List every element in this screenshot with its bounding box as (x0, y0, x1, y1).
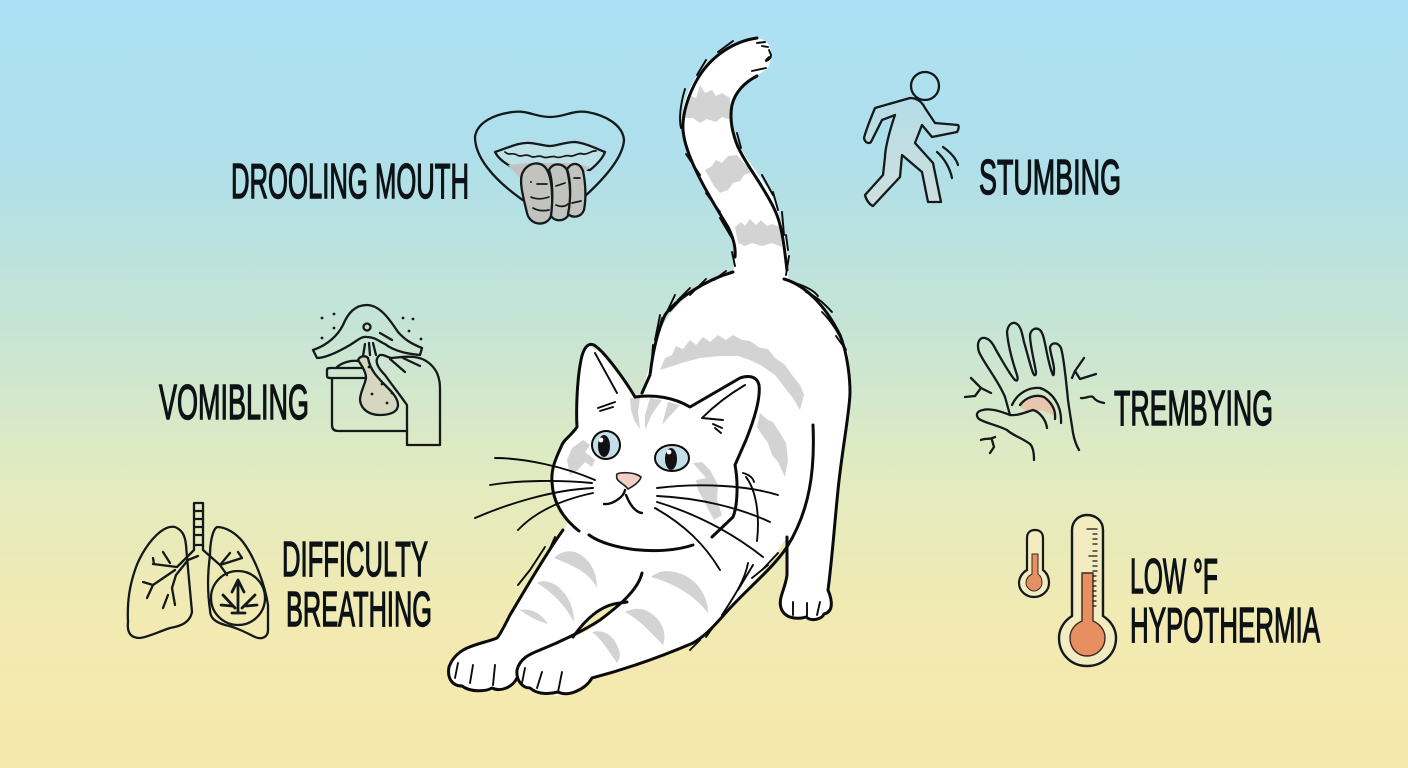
cat whiskers (475, 458, 778, 570)
icon: trembling hand (965, 323, 1104, 460)
symptom: vomiting (159, 305, 440, 445)
cat tail outline (680, 38, 789, 275)
symptom: stumbling (864, 72, 1121, 206)
cat rear paw (780, 537, 831, 620)
symptom: difficulty breathing (128, 503, 432, 638)
label: trembying: TREMBYING (1114, 382, 1273, 436)
icon: lungs (128, 503, 268, 638)
icon: drooling mouth (475, 112, 624, 224)
symptom: trembling (965, 323, 1273, 460)
icon: small thermometer (1019, 530, 1049, 597)
cat fur stripes (520, 85, 804, 663)
cat illustration (449, 38, 850, 695)
label: breathing: BREATHING (286, 583, 432, 637)
label: low degrees f: LOW °F (1130, 550, 1218, 604)
icon: large thermometer (1059, 515, 1116, 666)
label: vomibling: VOMIBLING (159, 376, 309, 430)
cat nose and mouth (604, 473, 642, 513)
label: stumbing: STUMBING (979, 151, 1121, 205)
cat front legs (449, 530, 693, 694)
cat belly and haunch lines (690, 425, 813, 650)
cat back fur outline (642, 271, 850, 590)
cat body and tail (449, 38, 850, 695)
symptom: drooling mouth (231, 112, 624, 224)
label: difficulty: DIFFICULTY (282, 533, 428, 587)
icon: vomiting (313, 305, 440, 445)
icon: stumbling figure (864, 72, 959, 206)
label: drooling mouth: DROOLING MOUTH (231, 155, 469, 209)
cat eyes (589, 428, 689, 471)
symptom: low temperature (1019, 515, 1320, 666)
cat head (552, 344, 760, 551)
